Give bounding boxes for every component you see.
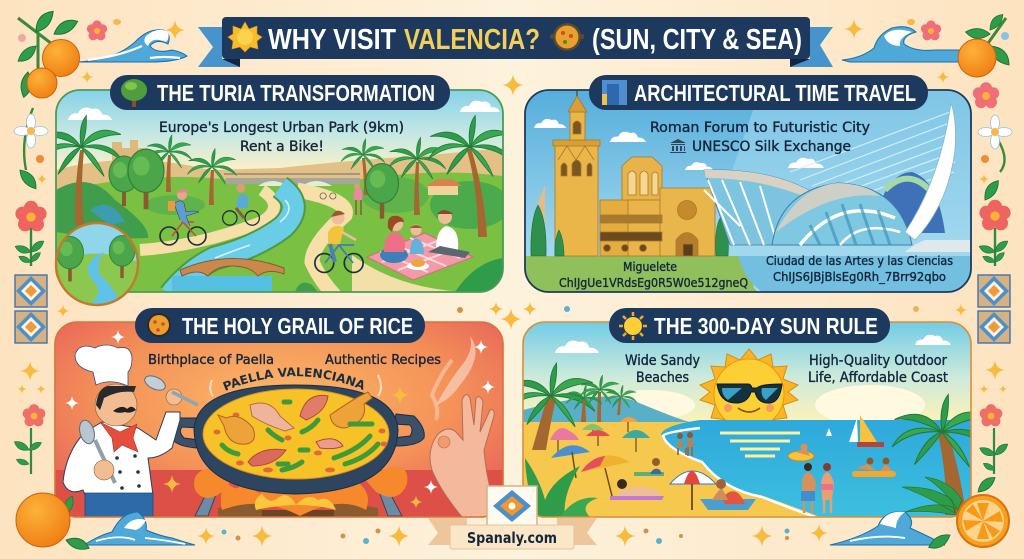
icon: buildings xyxy=(602,80,627,105)
text block: paella facts xyxy=(148,353,441,368)
beachgoers xyxy=(610,432,834,513)
curved label: Paella Valenciana: PAELLA VALENCIANA xyxy=(222,367,364,391)
decorative bottom-right citrus slice and wave xyxy=(830,475,1009,551)
Miguelete tower xyxy=(553,86,600,256)
cyclists in park xyxy=(160,183,363,272)
title text highlight: VALENCIA? xyxy=(404,24,540,56)
label: Ciudad de las Artes: ChIJS6JBjBlsEg0Rh_7Brr92qbo xyxy=(773,270,946,284)
icon: tree xyxy=(121,79,147,107)
Ciudad de las Artes y las Ciencias xyxy=(704,103,971,252)
chef xyxy=(63,345,198,517)
picnic family xyxy=(367,210,473,280)
left border tiles and flower xyxy=(13,275,69,474)
left border florals xyxy=(14,108,48,266)
decorative border: top-right orange and wave xyxy=(842,12,1012,83)
heading pill: Rice: THE HOLY GRAIL OF RICE xyxy=(182,313,413,339)
panel: The holy grail of rice xyxy=(55,322,503,517)
label: Miguelete: Miguelete xyxy=(623,260,677,274)
text block: outdoor life: Life, Affordable Coast xyxy=(808,370,948,386)
text block: architecture facts: UNESCO Silk Exchange xyxy=(692,139,851,155)
title text: WHY VISIT xyxy=(268,24,396,56)
text block: architecture facts: Roman Forum to Futuristic City xyxy=(650,120,871,136)
heading pill: Turia: THE TURIA TRANSFORMATION xyxy=(157,80,435,106)
sailboats and floats xyxy=(788,415,896,477)
label: Miguelete xyxy=(559,260,748,290)
brand badge: Spanaly.com xyxy=(467,529,557,547)
heading pill: Sun xyxy=(609,308,890,343)
text block: beaches xyxy=(625,353,701,386)
text block: beaches: Wide Sandy xyxy=(625,353,701,369)
icon: tile xyxy=(487,486,537,526)
decorative border: top-left oranges and wave xyxy=(15,8,187,99)
heading pill: Rice xyxy=(135,308,425,343)
right border tiles and flower xyxy=(955,275,1010,474)
label: Miguelete: ChIJgUe1VRdsEg0R5W0e512gneQ xyxy=(559,276,748,290)
label: Ciudad de las Artes: Ciudad de las Artes y las Ciencias xyxy=(766,254,953,268)
text block: paella facts: Birthplace of Paella xyxy=(148,353,274,368)
text block: beaches: Beaches xyxy=(636,370,689,386)
cathedral xyxy=(600,157,715,256)
beach umbrellas xyxy=(550,417,716,510)
heading pill: Architecture: ARCHITECTURAL TIME TRAVEL xyxy=(634,80,916,106)
heading pill: Sun: THE 300-DAY SUN RULE xyxy=(654,313,878,339)
text block: park facts: Europe's Longest Urban Park (9km) xyxy=(159,120,404,136)
panel: Architectural time travel xyxy=(525,86,971,292)
cypress trees xyxy=(531,205,728,256)
foreground palm and plants xyxy=(525,394,992,517)
text block: outdoor life xyxy=(808,353,948,386)
text block: park facts xyxy=(159,120,404,155)
icon: UNESCO temple xyxy=(670,139,686,153)
text block: outdoor life: High-Quality Outdoor xyxy=(809,353,948,369)
brand badge xyxy=(428,486,597,549)
text block: paella facts: Authentic Recipes xyxy=(325,353,441,368)
label: Ciudad de las Artes xyxy=(766,254,953,284)
OK hand xyxy=(430,394,494,517)
text block: architecture facts xyxy=(650,120,871,155)
title banner xyxy=(198,17,833,67)
title text subtitle: (SUN, CITY & SEA) xyxy=(592,24,802,56)
inset circle: river before the park xyxy=(56,223,138,305)
panel: Turia transformation xyxy=(39,90,512,305)
panel: The 300-day sun rule xyxy=(507,322,992,517)
right border florals xyxy=(973,82,1012,266)
icon: sun xyxy=(619,312,647,340)
heading pill: Architecture xyxy=(589,75,928,110)
icon: sun xyxy=(228,22,262,52)
sun with sunglasses xyxy=(700,349,798,429)
icon: paella pan xyxy=(550,23,584,51)
text block: park facts: Rent a Bike! xyxy=(240,139,324,155)
decorative bottom-left orange and wave xyxy=(16,493,195,554)
heading pill: Turia xyxy=(110,75,450,110)
paella pan xyxy=(170,385,424,494)
stove and flames xyxy=(194,467,407,517)
scattered sparkles xyxy=(197,74,919,547)
icon: paella xyxy=(147,313,171,337)
